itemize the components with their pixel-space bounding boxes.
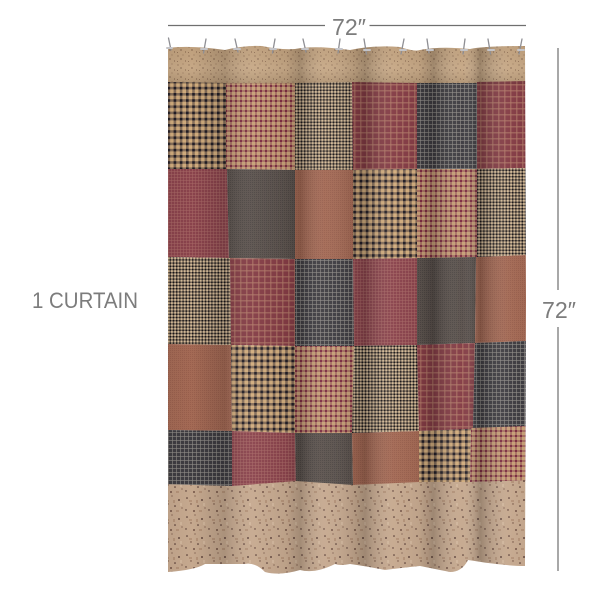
quantity label: 1 CURTAIN xyxy=(32,288,138,313)
row 1 patches xyxy=(167,81,526,170)
height dimension line xyxy=(557,48,559,571)
height label: 72″ xyxy=(542,297,576,323)
header band xyxy=(168,46,526,86)
width label: 72″ xyxy=(332,14,366,40)
row 3 patches xyxy=(167,255,527,346)
row 4 patches xyxy=(168,341,527,433)
bottom ruffle xyxy=(160,480,530,580)
curtain xyxy=(160,40,532,580)
header shading xyxy=(168,65,525,84)
row 5 patches xyxy=(168,426,526,486)
curtain hooks xyxy=(167,38,524,54)
row 2 patches xyxy=(167,168,526,259)
width dimension line xyxy=(168,24,526,26)
fold shading xyxy=(168,46,507,573)
